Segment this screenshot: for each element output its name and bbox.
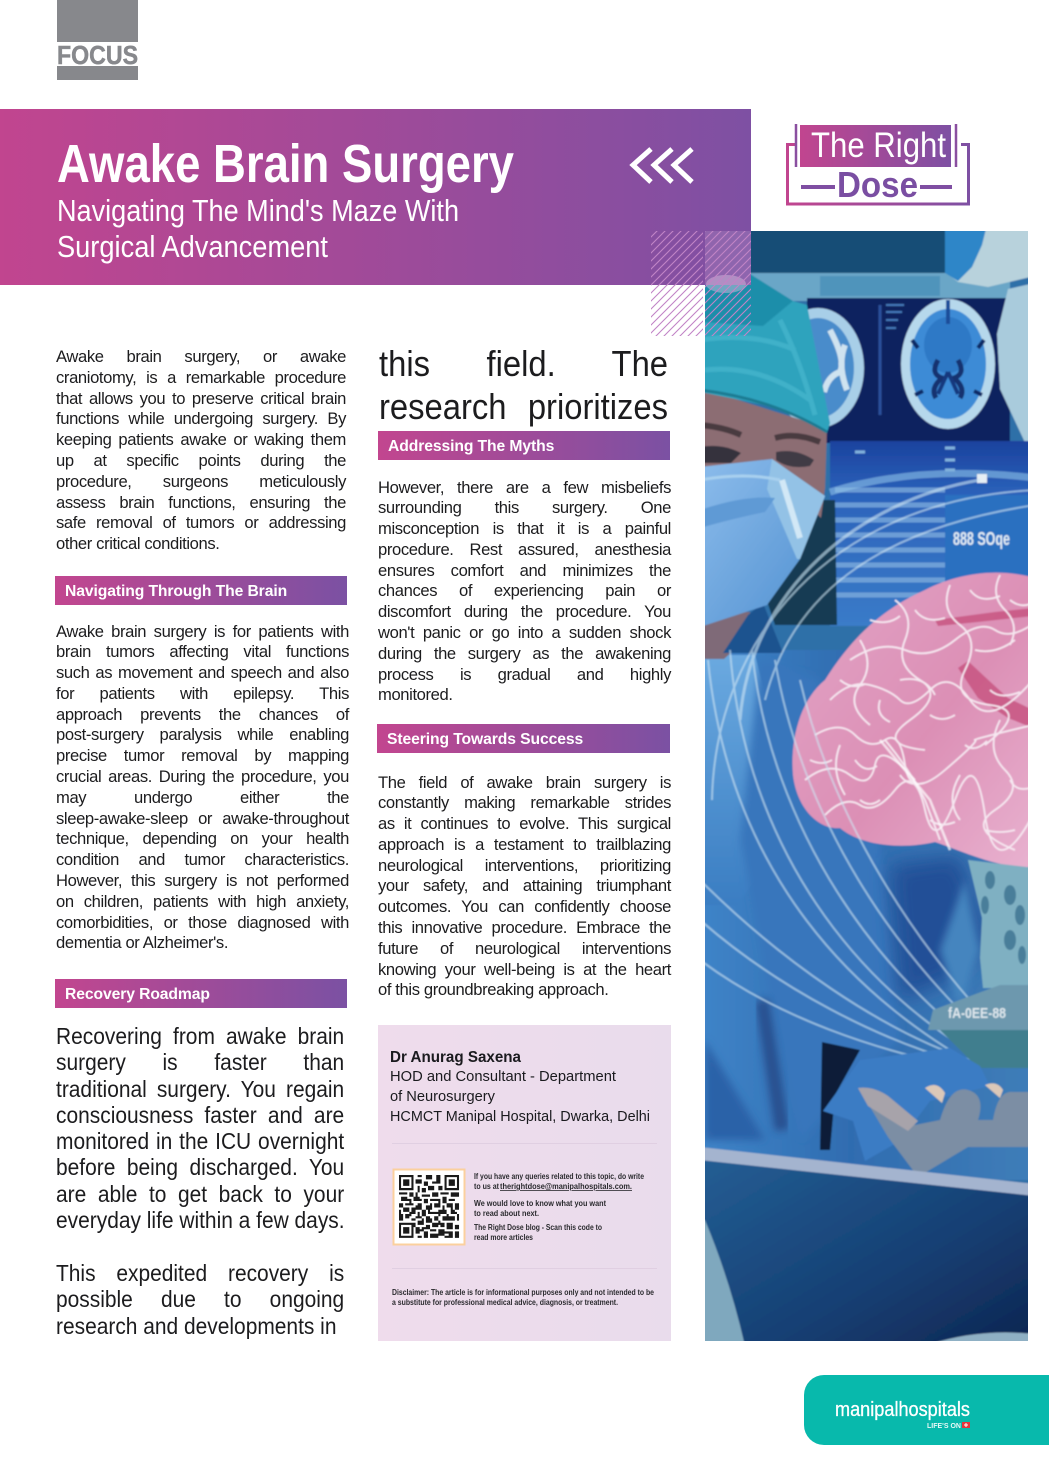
focus tag <box>57 0 138 80</box>
paragraph: navigating: precise tumor removal by mapping <box>56 746 349 765</box>
intro paragraph: Awake brain surgery, or awake <box>56 347 346 366</box>
paragraph: recovery: consciousness faster and are <box>56 1102 344 1128</box>
contact notes: therightdose@manipalhospitals.com. <box>500 1182 632 1191</box>
brain scan right <box>901 299 995 429</box>
intro paragraph: that allows you to preserve critical brain <box>56 389 346 408</box>
doctor credit: Dr Anurag Saxena <box>390 1049 521 1066</box>
header banner and brand graphics <box>0 0 970 336</box>
paragraph: navigating: such as movement and speech and also <box>56 663 349 682</box>
intro paragraph <box>56 347 346 553</box>
subtitle: Navigating The Mind's Maze With <box>57 193 459 228</box>
paragraph: expedited recovery: possible due to ongoing <box>56 1286 344 1312</box>
label text on equipment: fA-0EE-88 <box>948 1005 1006 1022</box>
paragraph: myths: monitored. <box>378 685 453 704</box>
disclaimer: Disclaimer: The article is for informational purposes only and not intended to be <box>392 1288 654 1297</box>
paragraph: myths: ensures comfort and minimizes the <box>378 561 671 580</box>
paragraph: recovery: surgery is faster than <box>56 1049 344 1075</box>
paragraph: recovery <box>56 1023 345 1233</box>
subtitle: Surgical Advancement <box>57 229 328 264</box>
contact notes: The Right Dose blog - Scan this code to <box>474 1223 602 1232</box>
paragraph: navigating: dementia or Alzheimer's. <box>56 933 228 952</box>
ceiling lamp and arm <box>944 231 1028 442</box>
contact notes: We would love to know what you want <box>474 1199 606 1208</box>
paragraph: navigating: on children, patients with high anxiety, <box>56 892 349 911</box>
gown <box>700 650 1035 1180</box>
title banner <box>0 109 751 285</box>
paragraph: success <box>378 772 672 999</box>
heading: recovery roadmap <box>55 979 347 1008</box>
paragraph: success: knowing your well-being is at the heart <box>378 960 671 979</box>
paragraph: myths: misconception is that it is a painful <box>378 519 671 538</box>
heading: addressing the myths: Addressing The Myths <box>388 438 554 455</box>
hatch pattern overlay <box>651 231 751 336</box>
contact notes <box>474 1172 644 1242</box>
upper monitor with brain scans <box>772 298 1010 443</box>
paragraph: myths: discomfort during the procedure. You <box>378 602 671 621</box>
heading: navigating through the brain <box>55 576 347 605</box>
icon: triple chevrons <box>633 149 692 182</box>
doctor credit <box>390 1049 650 1125</box>
paragraph: myths: surrounding this surgery. One <box>378 498 671 517</box>
paragraph: myths: during the surgery as the awakening <box>378 644 671 663</box>
photo: surgeon with holographic brain <box>705 231 1028 1341</box>
paragraph: navigating: comorbidities, or those diagnosed with <box>56 913 349 932</box>
paragraph: success: your safety, and attaining triumphant <box>378 876 671 895</box>
paragraph: recovery: monitored in the ICU overnight <box>56 1128 344 1154</box>
paragraph: success: of this groundbreaking approach. <box>378 980 608 999</box>
neck skin <box>700 612 750 659</box>
contact notes: to read about next. <box>474 1209 539 1218</box>
background equipment lower right <box>928 860 1035 1068</box>
paragraph: expedited recovery <box>56 1260 344 1339</box>
paragraph: expedited recovery: This expedited recovery is <box>56 1260 344 1286</box>
logo: the right dose: Dose <box>837 164 918 205</box>
paragraph: success: approach is a testament to trailblazing <box>378 835 671 854</box>
logo: the right dose <box>788 124 968 205</box>
hologram arcs <box>700 480 1035 1068</box>
intro paragraph: craniotomy, is a remarkable procedure <box>56 368 346 387</box>
large continuation text <box>379 343 668 427</box>
heading: addressing the myths <box>378 431 670 460</box>
surgical mask <box>700 459 825 627</box>
paragraph: success: this innovative procedure. Embrace the <box>378 918 671 937</box>
room background <box>735 231 1028 1184</box>
paragraph: recovery: are able to get back to your <box>56 1180 344 1206</box>
contact notes: read more articles <box>474 1233 533 1242</box>
intro paragraph: up at specific points during the <box>56 451 346 470</box>
intro paragraph: functions while undergoing surgery. By <box>56 409 346 428</box>
paragraph: myths: procedure. Rest assured, anesthesia <box>378 540 671 559</box>
hand <box>858 1083 1038 1177</box>
footer logo block <box>804 1375 1049 1445</box>
intro paragraph: other critical conditions. <box>56 534 220 553</box>
large continuation text: this field. The <box>379 343 668 384</box>
doctor credit: HCMCT Manipal Hospital, Dwarka, Delhi <box>390 1108 650 1125</box>
paragraph: recovery: everyday life within a few days. <box>56 1207 345 1233</box>
paragraph: success: constantly making remarkable strides <box>378 793 671 812</box>
paragraph: navigating: However, this surgery is not performed <box>56 871 349 890</box>
subtitle <box>57 193 459 264</box>
paragraph: navigating: technique, depending on your health <box>56 829 349 848</box>
footer logo block: manipalhospitals <box>835 1399 970 1421</box>
intro paragraph: keeping patients awake or waking them <box>56 430 346 449</box>
qr code <box>394 1170 464 1244</box>
paragraph: navigating: condition and tumor characteristics. <box>56 850 349 869</box>
surgeon face <box>700 388 827 518</box>
paragraph: navigating: sleep-awake-sleep or awake-throughout <box>56 809 349 828</box>
paragraph: recovery: Recovering from awake brain <box>56 1023 344 1049</box>
heading: recovery roadmap: Recovery Roadmap <box>65 986 210 1003</box>
intro paragraph: assess brain functions, ensuring the <box>56 493 346 512</box>
lower monitor readouts <box>830 441 1035 626</box>
intro paragraph: procedure, surgeons meticulously <box>56 472 346 491</box>
dark gap behind neck <box>765 500 837 625</box>
paragraph: success: The field of awake brain surgery is <box>378 772 671 792</box>
holographic brain <box>792 573 1035 867</box>
doctor credit: HOD and Consultant - Department <box>390 1068 617 1085</box>
large continuation text: research prioritizes <box>379 386 668 427</box>
footer logo block: LIFE'S ON <box>927 1423 961 1430</box>
disclaimer <box>392 1288 654 1307</box>
disclaimer: a substitute for professional medical advice, diagnosis, or treatment. <box>392 1298 618 1307</box>
paragraph: myths: chances of experiencing pain or <box>378 581 671 600</box>
monitor mirrored text: 888 SOqe <box>953 529 1010 549</box>
paragraph: success: future of neurological interventions <box>378 939 671 958</box>
intro paragraph: safe removal of tumors or addressing <box>56 513 346 532</box>
paragraph: expedited recovery: research and developments in <box>56 1312 336 1338</box>
paragraph: navigating: brain tumors affecting vital functions <box>56 642 349 661</box>
paragraph: myths: process is gradual and highly <box>378 665 671 684</box>
paragraph: navigating: approach prevents the chances of <box>56 705 349 724</box>
heading: steering towards success: Steering Towards Success <box>387 731 583 748</box>
paragraph: success: as it continues to evolve. This surgical <box>378 814 671 833</box>
paragraph: navigating: may undergo either the <box>56 788 349 807</box>
paragraph: navigating: Awake brain surgery is for patients with <box>56 622 349 640</box>
paragraph: navigating <box>56 622 350 952</box>
contact notes: If you have any queries related to this topic, do write <box>474 1172 644 1181</box>
contact card <box>378 1025 671 1341</box>
paragraph: success: neurological interventions, prioritizing <box>378 856 671 875</box>
paragraph: navigating: for patients with epilepsy. This <box>56 684 349 703</box>
logo: the right dose: The Right <box>811 126 946 165</box>
paragraph: success: outcomes. You can confidently choose <box>378 897 671 916</box>
sleeve <box>823 1048 990 1161</box>
paragraph: myths: won't panic or go into a sudden shock <box>378 623 671 642</box>
paragraph: recovery: before being discharged. You <box>56 1154 344 1180</box>
paragraph: myths <box>378 478 672 704</box>
heading: navigating through the brain: Navigating Through The Brain <box>65 583 287 600</box>
paragraph: navigating: post-surgery paralysis while enabling <box>56 725 349 744</box>
focus tag: FOCUS <box>57 40 138 70</box>
paragraph: myths: However, there are a few misbeliefs <box>378 478 671 496</box>
brain scan left <box>788 306 866 428</box>
title: Awake Brain Surgery <box>57 134 514 194</box>
surgical cap <box>700 274 830 433</box>
paragraph: recovery: traditional surgery. You regain <box>56 1076 344 1102</box>
contact notes: to us at <box>474 1182 499 1191</box>
tablet <box>700 1147 1035 1346</box>
heading: steering towards success <box>377 724 670 753</box>
paragraph: navigating: crucial areas. During the procedure, you <box>56 767 349 786</box>
doctor credit: of Neurosurgery <box>390 1088 495 1105</box>
